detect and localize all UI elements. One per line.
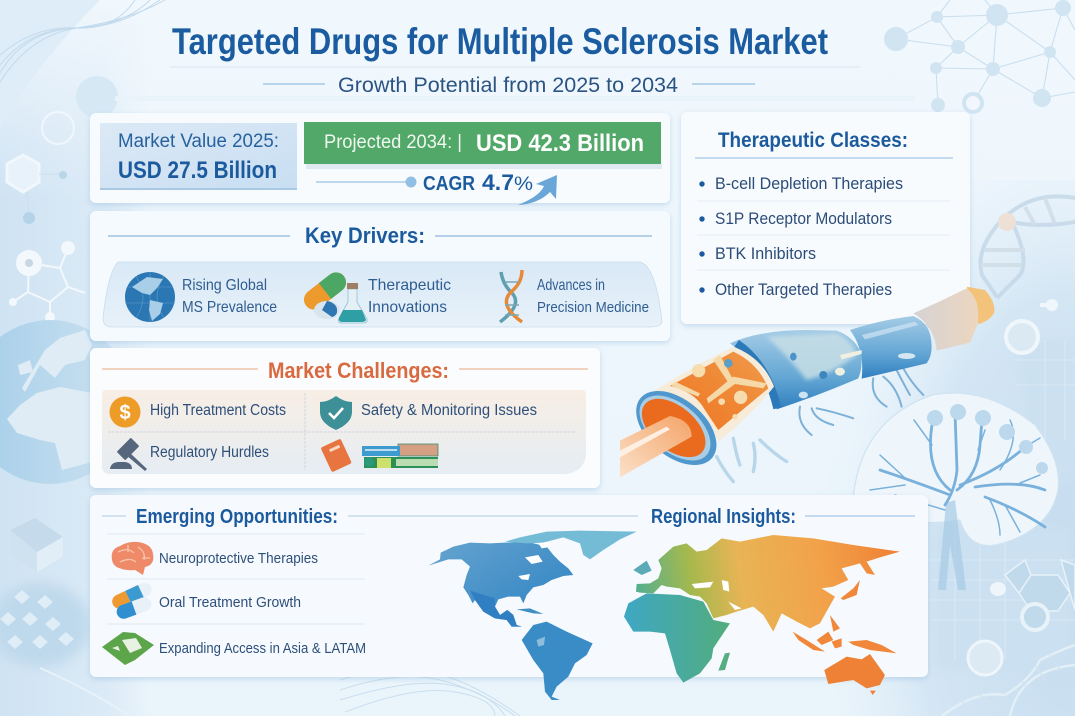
decoration: faded globe at left	[0, 320, 132, 484]
box: market value 2025	[100, 123, 297, 190]
icon: DNA helix	[500, 270, 522, 322]
text: neuroprotective therapies: Neuroprotective Therapies	[159, 550, 318, 567]
background: top fade	[0, 0, 1075, 200]
icon: dollar coin: $	[119, 402, 131, 424]
decoration: pale DNA strand right	[980, 196, 1075, 298]
decoration: diamond grid	[0, 590, 74, 649]
CAGR indicator: 4.7	[482, 170, 514, 195]
text: therapeutic innovations	[368, 277, 451, 316]
list: therapeutic classes	[699, 175, 903, 299]
text: precision medicine: Advances in	[537, 277, 605, 294]
heading: therapeutic classes: Therapeutic Classes:	[718, 129, 908, 152]
icon: brain	[112, 542, 153, 575]
row dividers	[107, 534, 365, 624]
text: market value label: Market Value 2025:	[118, 131, 279, 152]
text: projected amount: USD 42.3 Billion	[476, 130, 644, 157]
heading: emerging opportunities: Emerging Opportunities:	[136, 506, 338, 528]
text: regulatory hurdles: Regulatory Hurdles	[150, 444, 269, 461]
subtitle: Growth Potential from 2025 to 2034	[338, 74, 678, 97]
panel: market challenges	[90, 348, 600, 488]
text: precision medicine: Precision Medicine	[537, 299, 649, 316]
list: therapeutic classes: S1P Receptor Modulators	[715, 210, 892, 228]
divider under title	[170, 66, 860, 68]
arrow: growth	[518, 175, 557, 205]
icon: books	[321, 439, 438, 472]
text: rising global prevalence	[182, 277, 277, 316]
illustration: brain tree	[853, 393, 1059, 590]
background: right glow	[780, 180, 1075, 716]
decoration: circuit grid and hexagons at right	[930, 299, 1075, 675]
title: Targeted Drugs for Multiple Sclerosis Market	[172, 21, 828, 62]
box: projected 2034	[304, 122, 662, 169]
icon: shield	[320, 396, 352, 430]
text: safety and monitoring: Safety & Monitoring Issues	[361, 402, 537, 419]
decoration: molecular network top right	[884, 0, 1075, 112]
text: therapeutic innovations: Therapeutic	[368, 277, 451, 294]
text: high treatment costs: High Treatment Costs	[150, 402, 286, 419]
text: rising global prevalence: MS Prevalence	[182, 299, 277, 316]
icon: gavel	[110, 438, 147, 471]
decoration: top left circles and nodes	[7, 76, 915, 224]
decoration: bottom waves	[40, 668, 520, 716]
decoration: top left curve and wave lines	[0, 0, 165, 127]
icon: capsules	[110, 580, 154, 621]
text: oral treatment growth: Oral Treatment Growth	[159, 594, 301, 611]
text: therapeutic innovations: Innovations	[368, 299, 447, 316]
decoration: DNA ribbon bottom right	[942, 645, 1075, 716]
band: challenges grid	[102, 390, 586, 474]
heading: regional insights: Regional Insights:	[651, 506, 796, 528]
icon: globe	[125, 272, 175, 322]
heading: market challenges: Market Challenges:	[268, 358, 449, 383]
panel: opportunities and regional insights	[90, 495, 928, 677]
list dividers	[697, 201, 950, 270]
decoration: soft blue patches right	[935, 340, 1075, 670]
text: expanding access: Expanding Access in Asia & LATAM	[159, 640, 366, 657]
CAGR indicator	[316, 170, 557, 205]
decoration: molecule at left	[10, 242, 85, 321]
list: therapeutic classes: B-cell Depletion Therapies	[715, 175, 903, 193]
CAGR indicator: CAGR	[423, 173, 475, 195]
chart: world map	[428, 531, 900, 700]
grid dividers	[108, 393, 575, 470]
CAGR indicator: %	[514, 174, 533, 195]
panel: market value	[90, 113, 670, 203]
list: therapeutic classes: Other Targeted Therapies	[715, 281, 892, 299]
text: rising global prevalence: Rising Global	[182, 277, 267, 294]
text: market value amount: USD 27.5 Billion	[118, 157, 277, 184]
list: therapeutic classes: BTK Inhibitors	[715, 245, 816, 263]
panel: key drivers	[90, 211, 670, 341]
icon: green map	[102, 632, 154, 665]
illustration: nerve fiber with myelin sheath	[620, 287, 994, 482]
panel: therapeutic classes	[681, 112, 970, 324]
background: left column tint	[0, 0, 150, 716]
text: precision medicine	[537, 277, 649, 316]
icon: capsule and flask	[300, 268, 367, 323]
band: drivers row	[103, 262, 662, 327]
decoration: blurred patch behind diamond grid	[0, 583, 90, 667]
decoration: cube	[10, 518, 63, 572]
icon: dollar coin	[110, 396, 140, 428]
heading: key drivers: Key Drivers:	[305, 223, 425, 248]
text: projected label: Projected 2034: |	[324, 132, 462, 153]
